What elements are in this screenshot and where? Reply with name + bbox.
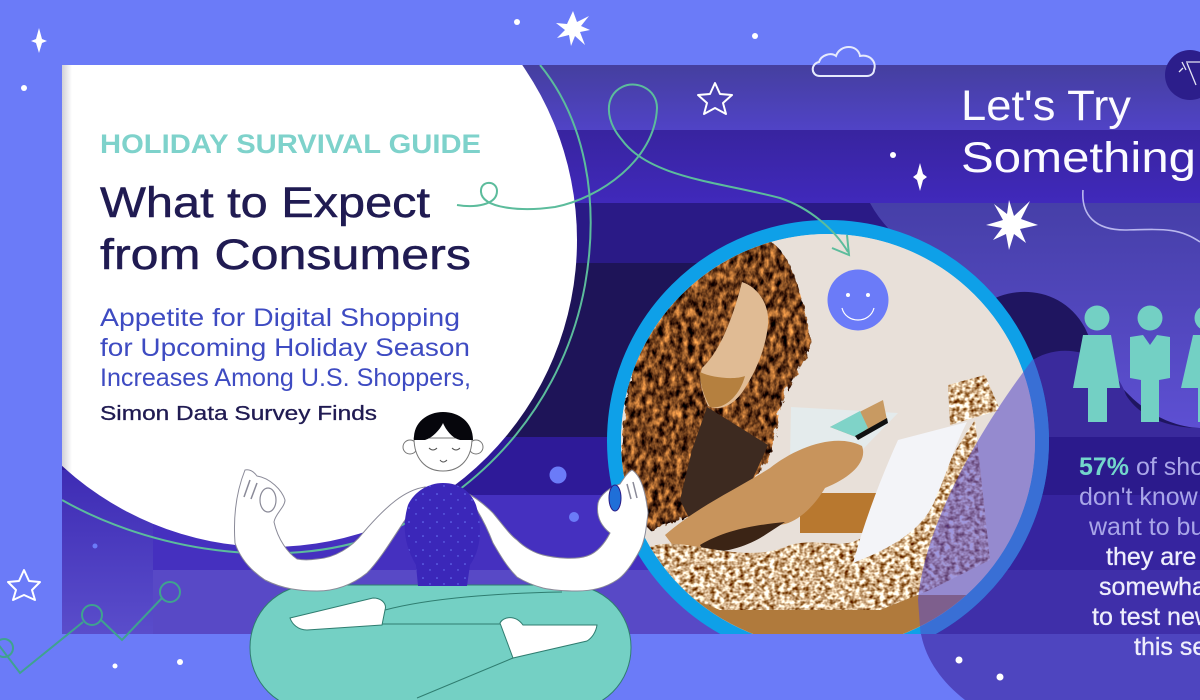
tinsel tuft: [948, 375, 1000, 425]
title: let's try something: Something: [961, 134, 1196, 182]
heading: What to Expect: [100, 179, 430, 227]
photo: woman shopping online: [614, 227, 1060, 655]
legs: [250, 585, 631, 700]
subheading: Appetite for Digital Shopping: [100, 304, 460, 332]
left arm: [234, 470, 425, 591]
arrow: looping green line: [457, 85, 849, 255]
woman 2: [1181, 306, 1200, 422]
icon: dark wand badge: [1165, 50, 1200, 100]
woman: [1073, 306, 1120, 422]
lower right circle: [921, 634, 1200, 700]
icon: four-point sparkles: [31, 28, 927, 191]
photo content: [620, 230, 1040, 650]
tinsel: [648, 420, 990, 610]
icon: smiley: [828, 270, 888, 330]
subheading: [100, 304, 471, 392]
curly line: [1083, 190, 1200, 242]
text block: 57% of shoppers: they are: [1106, 543, 1196, 571]
panel: banded backdrop: [62, 65, 1200, 634]
man: [1130, 306, 1170, 422]
head: [403, 412, 483, 471]
credit card: [830, 400, 888, 440]
icon: bursts: [556, 11, 1038, 250]
icon: people: [1073, 306, 1200, 422]
dots: [21, 19, 1004, 680]
title: holiday survival guide: HOLIDAY SURVIVAL GUIDE: [100, 129, 481, 159]
feet: [290, 598, 385, 630]
torso: [405, 483, 480, 586]
overlay on photo: [918, 359, 1049, 634]
heading: [100, 179, 471, 279]
icon: star outlines: [8, 83, 732, 600]
arm: [665, 441, 863, 555]
hair: [620, 240, 810, 530]
icon: meditating figure: [234, 412, 648, 700]
face: [700, 282, 768, 408]
subheading: Increases Among U.S. Shoppers,: [100, 364, 471, 392]
icon: line chart: [0, 582, 180, 673]
text block: 57% of shoppers: [1079, 453, 1200, 661]
panel: white intro circle: [62, 65, 577, 547]
title: let's try something: Let's Try: [961, 82, 1132, 130]
title: let's try something: [961, 82, 1196, 182]
laptop: [853, 422, 967, 563]
photo ring: [614, 227, 1042, 655]
heading: from Consumers: [100, 231, 471, 279]
icon: cloud: [813, 47, 875, 76]
right arm: [465, 470, 648, 591]
source line: Simon Data Survey Finds: [100, 403, 377, 425]
dark shirt: [680, 407, 768, 520]
thin green arc: [62, 65, 591, 554]
subheading: for Upcoming Holiday Season: [100, 334, 470, 362]
